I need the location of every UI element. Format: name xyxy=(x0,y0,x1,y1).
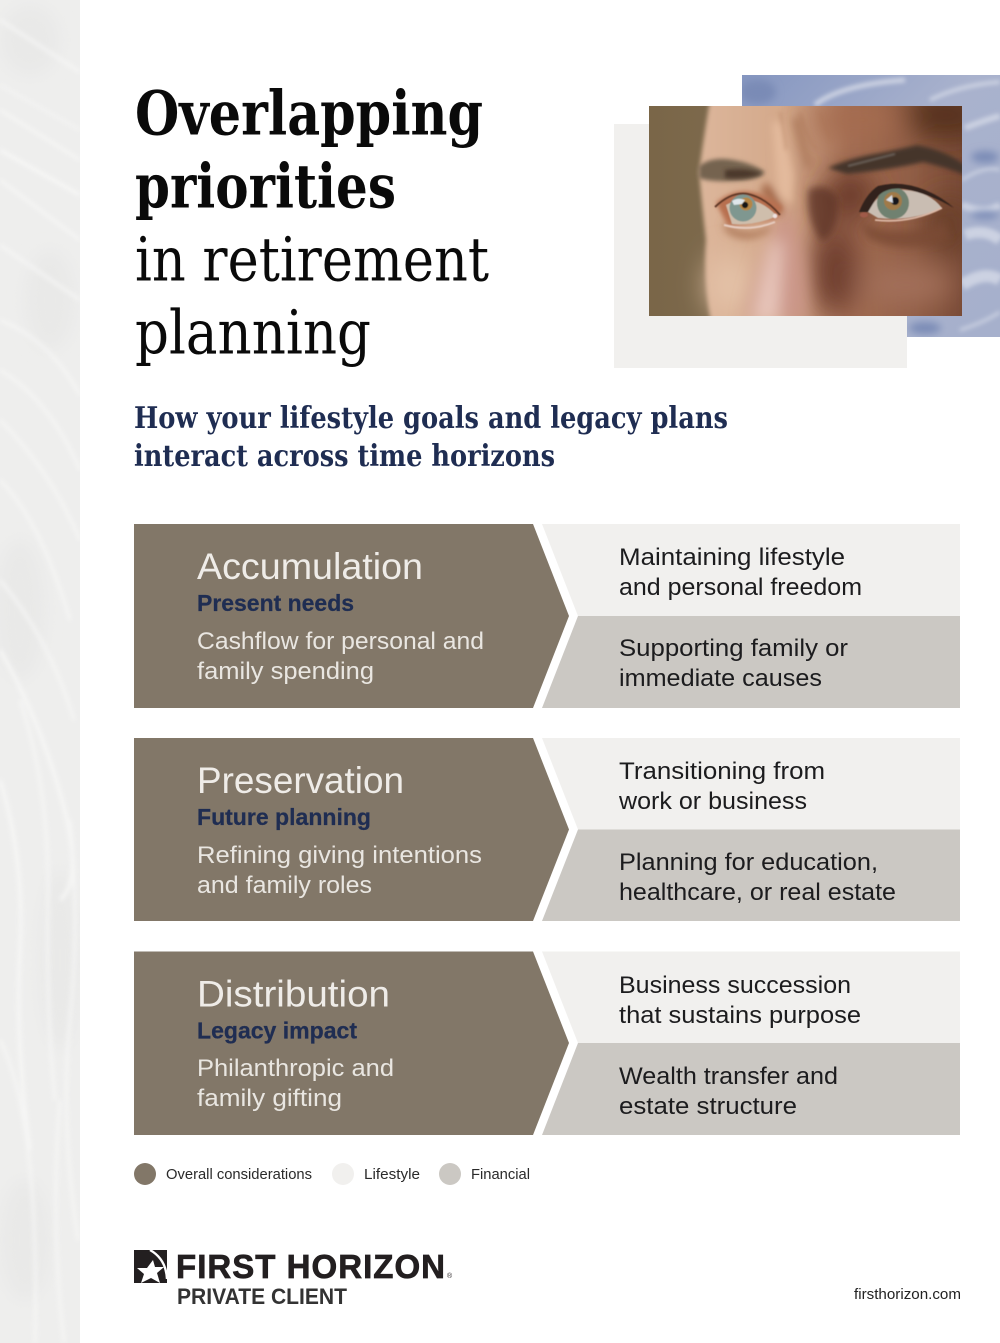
right eye xyxy=(859,184,954,221)
logo: First Horizon Private Client: FIRST HORIZON xyxy=(176,1248,445,1285)
text: Accumulation copy: Cashflow for personal and xyxy=(197,628,484,655)
panel: left texture strip xyxy=(0,0,80,1343)
title: priorities xyxy=(135,152,396,222)
icon: star badge xyxy=(134,1250,167,1283)
panel: Distribution financial xyxy=(542,1043,960,1135)
panel: Distribution row xyxy=(134,952,960,1135)
arrow: Accumulation overall considerations xyxy=(134,524,569,708)
website URL: firsthorizon.com xyxy=(854,1287,961,1303)
text: Distribution copy: Legacy impact xyxy=(197,1018,357,1044)
title: in retirement xyxy=(135,224,489,296)
panel: Accumulation lifestyle xyxy=(542,524,960,616)
panel: Distribution lifestyle xyxy=(542,952,960,1043)
eyebrows xyxy=(699,145,965,181)
text: Distribution lifestyle and financial items: Business succession xyxy=(619,972,851,999)
panel: Accumulation financial xyxy=(542,616,960,708)
text: Distribution copy xyxy=(197,974,394,1112)
text: Accumulation lifestyle and financial items: Maintaining lifestyle xyxy=(619,544,845,571)
text: Accumulation copy xyxy=(197,546,484,685)
title: Overlapping xyxy=(135,78,483,150)
text: Distribution lifestyle and financial items xyxy=(619,972,861,1120)
text: Preservation copy xyxy=(197,760,482,899)
text: Distribution lifestyle and financial items: estate structure xyxy=(619,1093,797,1120)
text: Accumulation lifestyle and financial items: and personal freedom xyxy=(619,574,862,601)
text: Distribution lifestyle and financial items: that sustains purpose xyxy=(619,1002,861,1029)
title: planning xyxy=(135,298,371,368)
text: Accumulation lifestyle and financial items: Supporting family or xyxy=(619,635,848,662)
legend xyxy=(134,1163,530,1185)
text: Accumulation lifestyle and financial items xyxy=(619,544,862,692)
text: Distribution copy: Philanthropic and xyxy=(197,1055,394,1082)
legend: Financial xyxy=(471,1166,530,1183)
text: Accumulation copy: Present needs xyxy=(197,590,354,616)
text: Preservation lifestyle and financial items: Planning for education, xyxy=(619,849,878,876)
text: Preservation lifestyle and financial items: Transitioning from xyxy=(619,758,825,785)
text: Accumulation lifestyle and financial items: immediate causes xyxy=(619,665,822,692)
text: Preservation copy: Refining giving intentions xyxy=(197,842,482,869)
text: Accumulation copy: family spending xyxy=(197,658,374,685)
arrow: Preservation overall considerations xyxy=(134,738,569,921)
subtitle: How your lifestyle goals and legacy plans xyxy=(134,401,728,436)
photo: close-up of a man's eyes xyxy=(649,106,962,316)
left eye xyxy=(715,191,783,228)
arrow: Distribution overall considerations xyxy=(134,952,569,1135)
subtitle: interact across time horizons xyxy=(134,439,555,474)
panel: Accumulation row xyxy=(134,524,960,708)
legend: Overall considerations xyxy=(166,1166,312,1183)
text: Preservation lifestyle and financial items: work or business xyxy=(618,788,807,815)
panel: Preservation lifestyle xyxy=(542,738,960,830)
text: Accumulation copy: Accumulation xyxy=(197,546,423,587)
legend: Lifestyle xyxy=(364,1166,420,1183)
text: Distribution lifestyle and financial items: Wealth transfer and xyxy=(619,1063,838,1090)
subtitle xyxy=(134,401,728,474)
frown lines xyxy=(780,114,788,148)
panel: blue stone texture xyxy=(740,75,1000,337)
logo: First Horizon Private Client: ® xyxy=(447,1272,453,1280)
text: Preservation lifestyle and financial items: healthcare, or real estate xyxy=(619,879,896,906)
logo: First Horizon Private Client: PRIVATE CLIENT xyxy=(177,1284,348,1309)
text: Preservation lifestyle and financial items xyxy=(618,758,896,906)
panel: Preservation row xyxy=(134,738,960,921)
text: Distribution copy: family gifting xyxy=(197,1085,342,1112)
face xyxy=(699,100,970,322)
title xyxy=(135,78,489,368)
text: Preservation copy: Future planning xyxy=(197,804,371,830)
text: Distribution copy: Distribution xyxy=(197,974,390,1014)
panel: light grey backing rectangle xyxy=(614,124,907,368)
panel: Preservation financial xyxy=(542,830,960,921)
text: Preservation copy: and family roles xyxy=(197,872,372,899)
text: Preservation copy: Preservation xyxy=(197,760,404,801)
nose xyxy=(750,218,816,316)
logo: First Horizon Private Client xyxy=(134,1248,453,1309)
